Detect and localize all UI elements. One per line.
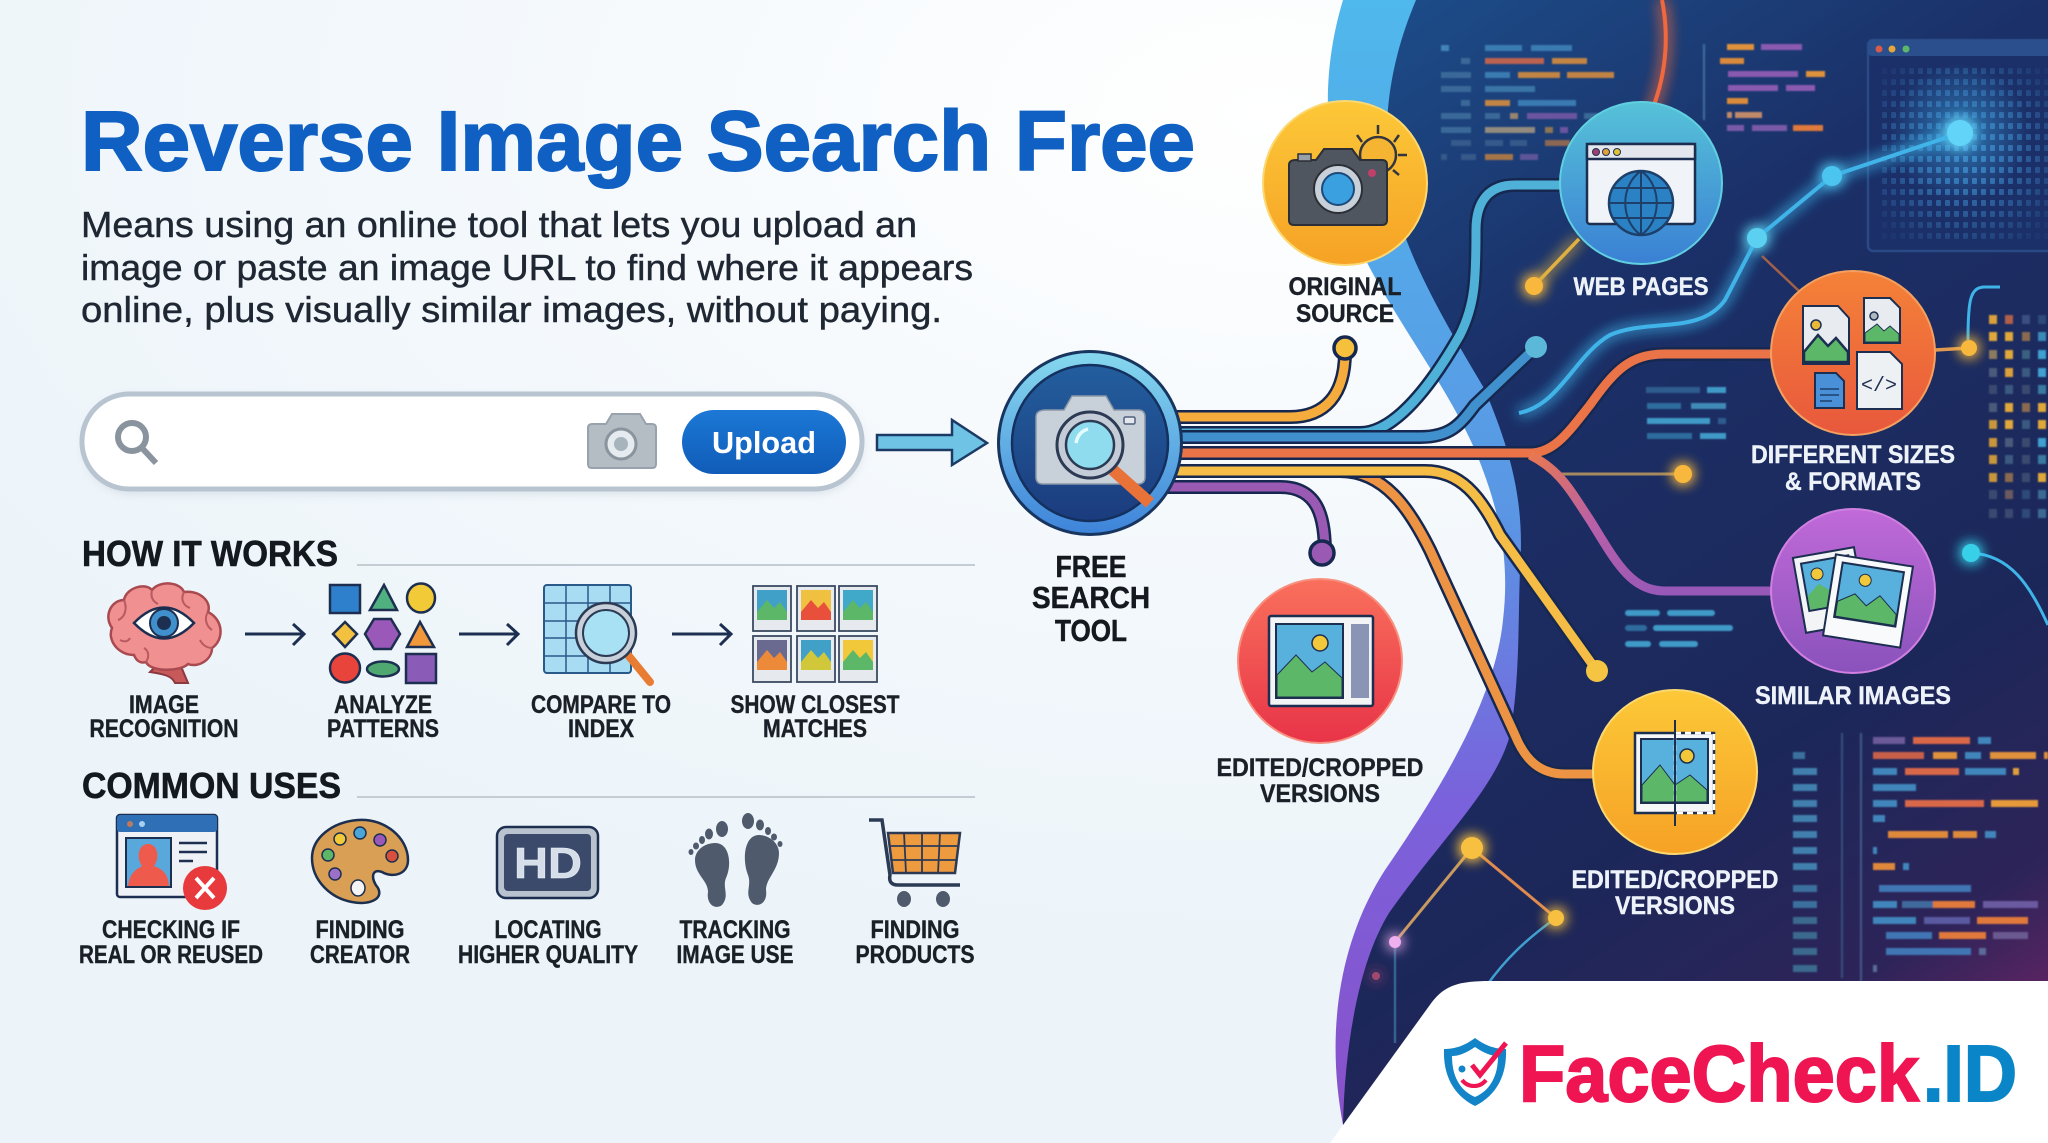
- title: Reverse Image Search Free: [81, 94, 1195, 188]
- label: edited versions right: VERSIONS: [1615, 892, 1735, 920]
- panel: dark network background: [1328, 0, 2048, 1143]
- label: web pages: WEB PAGES: [1574, 273, 1708, 301]
- node: web pages: [1560, 102, 1722, 264]
- use labels: FINDING: [870, 916, 960, 944]
- label: edited versions right: [1572, 866, 1778, 920]
- icon: footprints: [688, 813, 782, 907]
- heading: common uses: COMMON USES: [82, 765, 341, 806]
- description text: online, plus visually similar images, without paying.: [81, 289, 942, 330]
- code block top middle: [1703, 44, 1825, 131]
- label: free search tool: TOOL: [1055, 613, 1127, 648]
- label: edited versions left: [1216, 754, 1424, 808]
- use labels: TRACKING: [680, 916, 790, 944]
- label: free search tool: [1032, 549, 1150, 648]
- node: edited versions left: [1238, 579, 1402, 743]
- line: orange to original source: [1175, 337, 1356, 417]
- glowing cyan network line: [1519, 120, 1973, 413]
- icon: browser globe: [1587, 144, 1695, 235]
- curved colored band: [1328, 0, 2048, 1143]
- step labels: COMPARE TO: [531, 691, 671, 719]
- icon: photo matches grid: [753, 586, 877, 682]
- icon: sun: [1357, 125, 1407, 175]
- description text: Means using an online tool that lets you upload an: [81, 204, 917, 245]
- upload button: [682, 410, 846, 474]
- description text: [81, 204, 973, 330]
- line: purple to similar images: [1530, 455, 1775, 591]
- icon: profile window with X: [117, 815, 227, 910]
- use labels: CREATOR: [310, 941, 410, 969]
- panel: logo corner: [1330, 981, 2048, 1143]
- icon: stacked photos: [1793, 547, 1913, 648]
- step labels: INDEX: [568, 715, 634, 743]
- dot matrix right: [1989, 315, 2046, 518]
- icon: camera: [1289, 149, 1387, 225]
- icon: HD screen: HD: [514, 839, 582, 888]
- use labels: CHECKING IF: [102, 916, 240, 944]
- step labels: ANALYZE: [334, 691, 432, 719]
- step labels: RECOGNITION: [90, 715, 238, 743]
- search bar: [82, 394, 862, 493]
- label: different sizes: DIFFERENT SIZES: [1751, 441, 1955, 469]
- icon: document images: [1803, 298, 1902, 409]
- flow lines from search tool: [1165, 185, 1775, 774]
- icon: image with crop panel: [1269, 616, 1373, 706]
- icon: search: [118, 423, 156, 463]
- cyan line right of similar images: [1962, 544, 2048, 625]
- label: free search tool: SEARCH: [1032, 580, 1150, 615]
- label: different sizes: [1751, 441, 1955, 496]
- code block mini lower: [1625, 610, 1733, 647]
- label: original source: [1288, 273, 1402, 328]
- label: original source: ORIGINAL: [1288, 273, 1402, 301]
- node: similar images: [1771, 509, 1935, 673]
- icon: grid with magnifier: [544, 585, 650, 682]
- heading: how it works: HOW IT WORKS: [82, 533, 338, 574]
- label: free search tool: FREE: [1056, 549, 1126, 584]
- logo suffix: .ID: [1923, 1029, 2017, 1118]
- constellation lower left: [1372, 837, 1564, 1043]
- icon: HD screen: [497, 827, 598, 898]
- node: edited versions right: [1593, 690, 1757, 854]
- arrow: [672, 624, 731, 645]
- code block bottom right: [1793, 733, 2048, 981]
- use labels: [79, 916, 974, 969]
- yellow node by web pages: [1525, 239, 1579, 295]
- step labels: PATTERNS: [327, 715, 439, 743]
- label: similar images: SIMILAR IMAGES: [1755, 682, 1951, 710]
- node: different sizes: [1771, 271, 1935, 435]
- step labels: SHOW CLOSEST: [730, 691, 900, 719]
- label: edited versions left: VERSIONS: [1260, 780, 1380, 808]
- dark panel fill: [1343, 0, 2048, 1143]
- icon: shopping cart: [869, 820, 960, 907]
- logo: FaceCheck.ID: [1444, 1029, 2017, 1118]
- icon: shield: [1444, 1038, 1506, 1106]
- label: edited versions right: EDITED/CROPPED: [1572, 866, 1778, 894]
- label: original source: SOURCE: [1296, 300, 1394, 328]
- upload button: Upload: [712, 425, 816, 460]
- use labels: HIGHER QUALITY: [458, 941, 638, 969]
- node right of different sizes: [1935, 287, 2000, 356]
- use labels: FINDING: [316, 916, 404, 944]
- icon: document images: </>: [1861, 375, 1897, 398]
- step labels: IMAGE: [129, 691, 199, 719]
- orange arc top: [1650, 0, 1666, 115]
- use labels: LOCATING: [494, 916, 602, 944]
- use labels: REAL OR REUSED: [79, 941, 263, 969]
- icon: palette: [312, 820, 408, 903]
- line: orange-red to different sizes: [1175, 354, 1775, 453]
- code block top left: [1441, 45, 1614, 160]
- arrow: [459, 624, 518, 645]
- node: original source: [1263, 101, 1427, 265]
- use labels: PRODUCTS: [856, 941, 974, 969]
- label: edited versions left: EDITED/CROPPED: [1216, 754, 1424, 782]
- faint link to different sizes: [1762, 256, 1800, 292]
- code block mini centre: [1646, 387, 1726, 439]
- icon: shapes: [330, 584, 436, 683]
- search tool hub: [997, 350, 1183, 536]
- line: yellow to node: [1175, 471, 1608, 682]
- description text: image or paste an image URL to find where it appears: [81, 247, 973, 288]
- line: purple to edited versions left: [1165, 487, 1334, 565]
- icon: camera: [588, 414, 656, 468]
- step labels: [90, 691, 900, 743]
- terminal window: [1868, 40, 2048, 251]
- icon: brain with eye: [108, 583, 221, 683]
- label: different sizes: & FORMATS: [1785, 468, 1921, 496]
- icon: camera with magnifier: [1036, 396, 1150, 503]
- line: orange to edited versions right: [1175, 471, 1600, 774]
- arrow: [245, 624, 304, 645]
- step labels: MATCHES: [763, 715, 867, 743]
- line: blue to web pages: [1175, 185, 1565, 433]
- icon: cropped image: [1635, 720, 1714, 826]
- line: blue to node: [1175, 336, 1547, 437]
- logo wordmark: FaceCheck: [1519, 1029, 1919, 1118]
- use labels: IMAGE USE: [676, 941, 794, 969]
- orange glowing node centre: [1560, 465, 1692, 483]
- arrow to search tool: [877, 420, 987, 465]
